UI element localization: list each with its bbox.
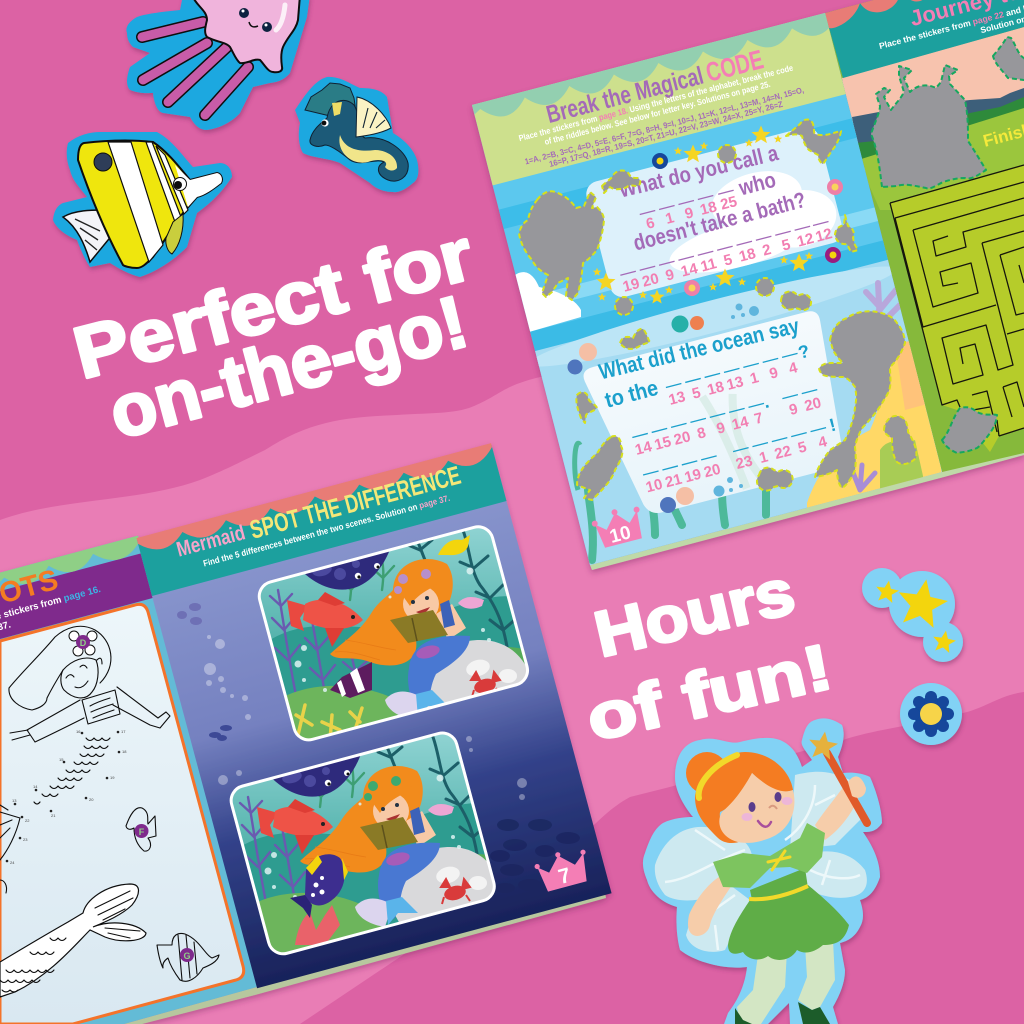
riddle box 1: 5 xyxy=(780,236,792,255)
riddle box 2: 5 xyxy=(690,384,703,403)
riddle box 2: 15 xyxy=(653,433,673,454)
page stack edge xyxy=(590,450,1024,570)
riddle box 2: 13 xyxy=(667,388,687,409)
sticker: seahorse xyxy=(295,77,418,192)
sticker: jellyfish xyxy=(126,0,310,130)
riddle box 2: 14 xyxy=(633,438,654,459)
yellow coral xyxy=(296,705,362,740)
mermaid silhouette xyxy=(815,311,905,488)
connect-the-dots numbers: 24 xyxy=(10,860,15,865)
riddle box 2: 10 xyxy=(644,476,664,496)
bottom silhouette xyxy=(942,407,997,453)
line art: seahorse F: F xyxy=(139,827,145,837)
flower decorations xyxy=(652,153,843,296)
yellow star decorations xyxy=(593,126,813,303)
left page: magical code xyxy=(470,13,942,570)
riddle box 2: ! xyxy=(827,414,838,435)
picture 1 xyxy=(258,525,530,742)
riddle box 1: 19 xyxy=(621,275,641,296)
heading: Hours of fun!: of fun! xyxy=(580,630,838,755)
line art: fish G xyxy=(157,933,219,981)
sand and plants xyxy=(575,283,945,560)
shells and bubbles xyxy=(568,304,759,513)
riddle box 2: 22 xyxy=(773,442,793,463)
flower with letter D: D xyxy=(80,638,87,648)
heading: Perfect for on-the-go!: Perfect for xyxy=(66,214,481,394)
underwater area xyxy=(498,118,942,565)
riddle box 2: 4 xyxy=(816,433,829,452)
left page: magical code: CODE xyxy=(703,44,766,88)
header band xyxy=(137,445,507,596)
left page: magical code: 16=P, 17=Q, 18=R, 19=S, 20=T, 21=U, 22=V, 23=W, 24=X, 25=Y, 26=Z xyxy=(548,99,784,169)
left page: dot to dot xyxy=(0,536,257,1024)
flower with letter D xyxy=(69,631,97,656)
riddle box 2: 1 xyxy=(748,369,761,388)
connect-the-dots numbers: 18 xyxy=(122,749,127,754)
riddle box 2: . xyxy=(761,391,771,412)
riddle box 1: 9 xyxy=(664,266,676,285)
riddle box 1: 6 xyxy=(644,214,657,233)
mountains xyxy=(852,88,1024,160)
activity book: magical code and maze xyxy=(460,0,1024,580)
page stack edge xyxy=(124,893,606,1024)
top silhouette xyxy=(993,37,1024,82)
riddle box 2: ? xyxy=(796,341,812,363)
riddle box 1: 18 xyxy=(698,198,719,219)
sky xyxy=(842,27,1024,175)
background fish and bubbles xyxy=(177,603,580,893)
riddle box 2: 9 xyxy=(768,364,780,383)
heading: Perfect for on-the-go! xyxy=(66,214,481,454)
line art: seahorse F xyxy=(126,808,156,851)
riddle box 2: 9 xyxy=(787,400,800,419)
letter key: 1=A, 2=B, 3=C, 4=D, 5=E, 6=F, 7=G, 8=H, 9=I, 10=J, 11=K, 12=L, 13=M, 14=N, 15=O, xyxy=(524,85,805,166)
riddle box 1: 1 xyxy=(664,209,676,228)
line art: scales xyxy=(34,738,110,804)
connect-the-dots numbers: 23 xyxy=(23,837,28,842)
page number 7: 7 xyxy=(556,864,573,889)
sticker: fairy xyxy=(643,718,882,1024)
riddle box 1: 25 xyxy=(719,193,739,214)
heading: Perfect for on-the-go!: on-the-go! xyxy=(101,280,476,454)
duck silhouette xyxy=(786,120,841,164)
maze xyxy=(890,165,1024,452)
riddle box 1: 12 xyxy=(814,225,834,246)
sky band xyxy=(472,13,942,565)
riddle box 2 xyxy=(584,311,842,513)
instructions: Find the 5 differences between the two scenes. Solution on page 37. xyxy=(202,493,451,568)
connect-the-dots numbers: 17 xyxy=(121,729,126,734)
line art: partial fin xyxy=(0,805,20,893)
riddle box 1: 14 xyxy=(679,260,700,281)
riddle box 1: What do you call a xyxy=(616,140,781,203)
right page: spot the difference xyxy=(136,443,612,988)
yellow fish xyxy=(438,535,470,555)
connect-the-dots numbers: 16 xyxy=(76,729,81,734)
connect-the-dots numbers: 22 xyxy=(25,818,30,823)
riddle box 2: 19 xyxy=(683,466,703,486)
header green xyxy=(472,13,846,186)
instructions: Place the stickers from page 18. Using the letters of the alphabet, break the code xyxy=(518,63,794,143)
seahorse silhouette xyxy=(884,416,916,464)
hair ornaments xyxy=(364,776,401,801)
riddle box 2: 1 xyxy=(757,448,770,467)
connect-the-dots numbers: 14 xyxy=(33,784,38,789)
riddle box 1: doesn't take a bath? xyxy=(631,187,808,255)
riddle box 2: 21 xyxy=(663,471,684,491)
riddle box 1: 18 xyxy=(737,245,758,266)
riddle box 2: 7 xyxy=(753,409,765,428)
riddle box 1: 20 xyxy=(640,270,661,291)
riddle box 2: 5 xyxy=(796,438,808,457)
riddle box 2: 20 xyxy=(803,394,823,415)
riddle box 2: to the xyxy=(602,375,661,413)
activity book: mermaid spot the difference xyxy=(0,443,612,1024)
riddle box 2: 20 xyxy=(672,428,692,449)
riddle box 2: 4 xyxy=(787,359,800,378)
sticker: blue flower xyxy=(900,683,962,745)
riddle box 2: 14 xyxy=(730,413,751,434)
title: Mermaid xyxy=(174,521,248,562)
right page: maze xyxy=(825,0,1024,475)
riddle box 1: 11 xyxy=(699,255,718,276)
riddle box 2: 20 xyxy=(702,461,722,481)
right page: spot the difference: SPOT THE DIFFERENCE xyxy=(246,460,464,545)
riddle box 1: 12 xyxy=(795,230,816,251)
riddle box 1: 5 xyxy=(722,251,734,270)
connect-the-dots numbers: 20 xyxy=(89,797,94,802)
connect-the-dots numbers: 13 xyxy=(12,798,17,803)
line art: mermaid tail xyxy=(0,884,146,997)
left page: magical code: of the riddles below. See below for letter key. Solutions on page 25. xyxy=(543,79,771,147)
heading: Hours of fun! xyxy=(580,555,838,755)
connect-the-dots numbers xyxy=(6,729,127,865)
connect-the-dots numbers: 15 xyxy=(59,757,64,762)
riddle box 1: 9 xyxy=(683,204,695,223)
fairy silhouette xyxy=(519,191,604,300)
riddle box 1: who xyxy=(735,167,778,201)
blue fish xyxy=(290,854,348,918)
scallop border xyxy=(472,13,829,116)
white cloud left xyxy=(515,272,581,332)
riddle box 2: 13 xyxy=(725,373,745,394)
riddle box 2: 9 xyxy=(715,419,727,438)
sticker: butterflyfish xyxy=(53,132,232,277)
pink coral xyxy=(295,905,340,945)
riddle box 2: 8 xyxy=(695,424,708,443)
heading and instructions xyxy=(879,0,1024,147)
riddle box 1: 2 xyxy=(761,241,773,260)
connect-the-dots numbers: 19 xyxy=(110,775,115,780)
teal header xyxy=(825,0,1024,78)
riddle box 1 xyxy=(583,125,846,300)
line art: fish G: G xyxy=(183,951,191,961)
castle silhouette xyxy=(871,65,986,189)
picture 2 xyxy=(230,732,496,956)
line art: mermaid xyxy=(9,626,170,742)
riddle box 2: 23 xyxy=(734,452,754,473)
riddle box 2: What did the ocean say xyxy=(596,313,802,384)
riddle box 2: 18 xyxy=(706,378,726,399)
page number 7 xyxy=(532,845,593,894)
connect-the-dots numbers: 21 xyxy=(51,813,56,818)
striped fish xyxy=(330,662,372,698)
title: Break the Magical xyxy=(544,62,706,129)
hair ornaments xyxy=(394,569,431,594)
sticker: stars xyxy=(862,568,963,662)
heading: Hours of fun!: Hours xyxy=(588,555,801,671)
page number 10 xyxy=(592,506,642,548)
page number 10: 10 xyxy=(608,522,633,548)
small silhouettes xyxy=(576,145,858,500)
